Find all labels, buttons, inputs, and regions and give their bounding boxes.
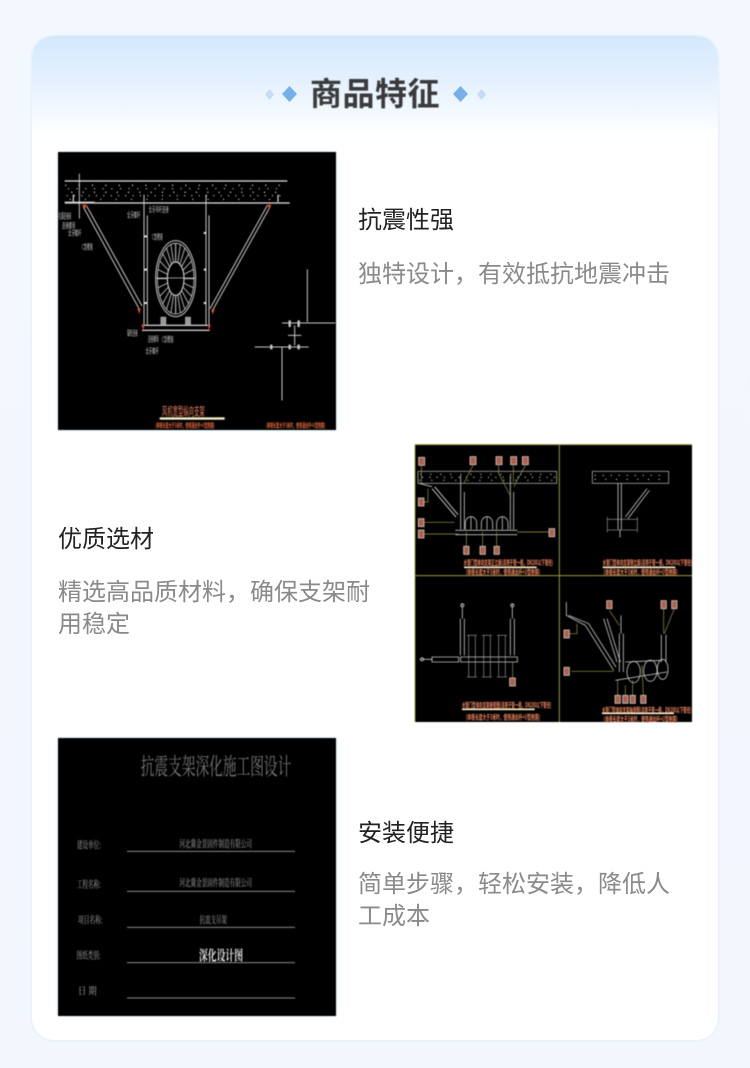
icon: left diamond [282,86,297,102]
drawing caption: 风机宽型纵向支架 [162,402,205,419]
captions: (单根长度大于3米时，使用通丝杆+U型抱箍) [466,568,540,578]
bottom-left view [420,604,517,677]
icon: right diamond [453,86,468,102]
title: 商品特征 with diamonds [265,76,486,112]
red joints [82,205,271,330]
image: fan longitudinal seismic bracket drawing [58,152,336,430]
bottom-right view [566,602,668,683]
feature heading: 抗震性强 [358,207,454,234]
captions: (单根长度大于3米时，使用通丝杆+U型抱箍) [466,713,540,723]
labels: C型槽钢 [82,241,93,252]
drawing caption [155,402,325,430]
callout tags [418,457,555,554]
image: water pipe seismic bracket four-view drawing [414,443,693,724]
labels: 全牙螺杆 [127,210,141,221]
labels: 全牙吊杆连接 [149,204,169,215]
form rows: 抗震支吊架 [200,912,227,927]
text block: strong seismic resistance [358,207,670,288]
feature description: 精选高品质材料，确保支架耐用稳定 [58,579,370,638]
concrete slab [65,174,290,219]
leader lines [421,465,549,546]
bracket members [73,195,335,400]
image: fan longitudinal seismic bracket drawing: C型槽钢 [162,334,173,345]
icon: small left diamond [265,89,274,100]
form rows: 河北冀金景固件制造有限公司 [179,836,252,851]
labels: 锚栓连接 [127,327,138,338]
icon: small right diamond [477,89,486,100]
feature heading: 优质选材 [58,526,154,553]
labels [59,204,173,356]
feature description: 简单步骤，轻松安装，降低人工成本 [358,871,670,930]
captions: 水管门型单向支架正立面(适用于管一根，DN200以下管径) [464,558,553,568]
fan [156,241,196,325]
top-right view [592,471,669,537]
header gradient band [32,36,718,136]
labels: C型槽钢 [152,231,163,242]
form rows: 河北冀金景固件制造有限公司 [179,874,252,889]
heading text: 商品特征 [310,76,440,112]
text block: quality material [58,526,370,638]
captions [462,558,692,724]
captions: 水管门型单向支架俯视图(适用于管一根，DN200以下管径) [462,701,551,711]
feature heading: 安装便捷 [358,820,454,847]
form rows: 图纸类别: [77,947,101,962]
form rows: 深化设计图 [199,946,243,966]
labels: 连接螺母 [62,220,75,231]
form rows: 项目名称: [78,911,103,926]
labels: 全牙螺杆 [145,345,159,356]
callout tags lower [510,601,677,703]
text block: easy installation [358,820,670,930]
form rows: 日 期 [78,983,97,998]
form rows: 建设单位: [77,837,101,852]
labels: 全牙螺杆 [68,227,82,238]
image: seismic bracket design title sheet [58,738,336,1016]
feature description: 独特设计，有效抵抗地震冲击 [358,261,670,288]
top-left view [418,471,557,535]
labels: 抗震连接座 [59,211,71,222]
labels: 连接螺母 [148,333,159,344]
grid lines [415,445,692,722]
form rows: 工程名称: [77,876,101,891]
form rows [77,836,252,998]
drawing caption: (单根长度大于3米时，使用通丝杆+U型抱箍) [155,421,215,430]
